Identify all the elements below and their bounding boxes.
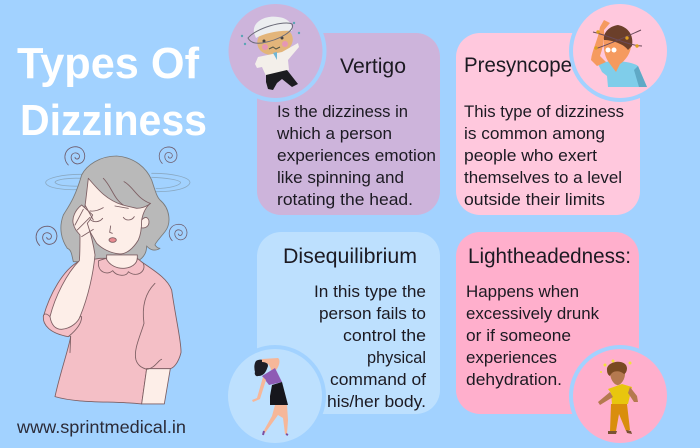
heading: disequilibrium: Disequilibrium	[283, 245, 417, 268]
text block: vertigo: which a person	[276, 124, 392, 143]
title: Types Of	[17, 39, 199, 88]
text block: presyncope: is common among	[464, 124, 605, 143]
text block: presyncope: outside their limits	[464, 190, 605, 209]
text block: lightheadedness	[466, 282, 599, 389]
illustration: dizzy woman	[36, 147, 190, 404]
heading: presyncope: Presyncope	[464, 54, 572, 77]
text block: vertigo: like spinning and	[277, 168, 404, 187]
text block: lightheadedness: excessively drunk	[466, 304, 599, 323]
icon: presyncope character	[569, 0, 671, 102]
panel: lightheadedness	[456, 232, 639, 414]
text block: lightheadedness: experiences	[466, 348, 557, 367]
icon: lightheadedness character	[569, 345, 671, 447]
text block: lightheadedness: Happens when	[466, 282, 579, 301]
panel: presyncope	[456, 33, 640, 215]
text block: vertigo: Is the dizziness in	[277, 102, 408, 121]
icon: vertigo character	[224, 0, 326, 102]
title: Dizziness	[20, 96, 207, 145]
text block: vertigo: experiences emotion	[277, 146, 436, 165]
text block: disequilibrium: person fails to	[319, 304, 426, 323]
panel: disequilibrium	[257, 232, 440, 414]
text block: presyncope: people who exert	[464, 146, 597, 165]
text block: disequilibrium: physical	[367, 348, 426, 367]
heading: vertigo: Vertigo	[340, 55, 406, 78]
text block: vertigo: rotating the head.	[277, 190, 413, 209]
text block: vertigo	[276, 102, 436, 209]
text block: presyncope: This type of dizziness	[464, 102, 624, 121]
website url: www.sprintmedical.in	[16, 417, 186, 437]
panel: vertigo	[257, 33, 440, 215]
text block: lightheadedness: dehydration.	[466, 370, 562, 389]
icon: disequilibrium character	[224, 345, 326, 447]
text block: presyncope	[464, 102, 624, 209]
text block: disequilibrium: his/her body.	[327, 392, 426, 411]
text block: presyncope: themselves to a level	[464, 168, 622, 187]
heading: lightheadedness: Lightheadedness:	[468, 245, 631, 268]
title	[17, 39, 207, 145]
text block: disequilibrium	[314, 282, 426, 411]
text block: disequilibrium: control the	[343, 326, 426, 345]
text block: disequilibrium: In this type the	[314, 282, 426, 301]
text block: disequilibrium: command of	[330, 370, 426, 389]
text block: lightheadedness: or if someone	[466, 326, 571, 345]
